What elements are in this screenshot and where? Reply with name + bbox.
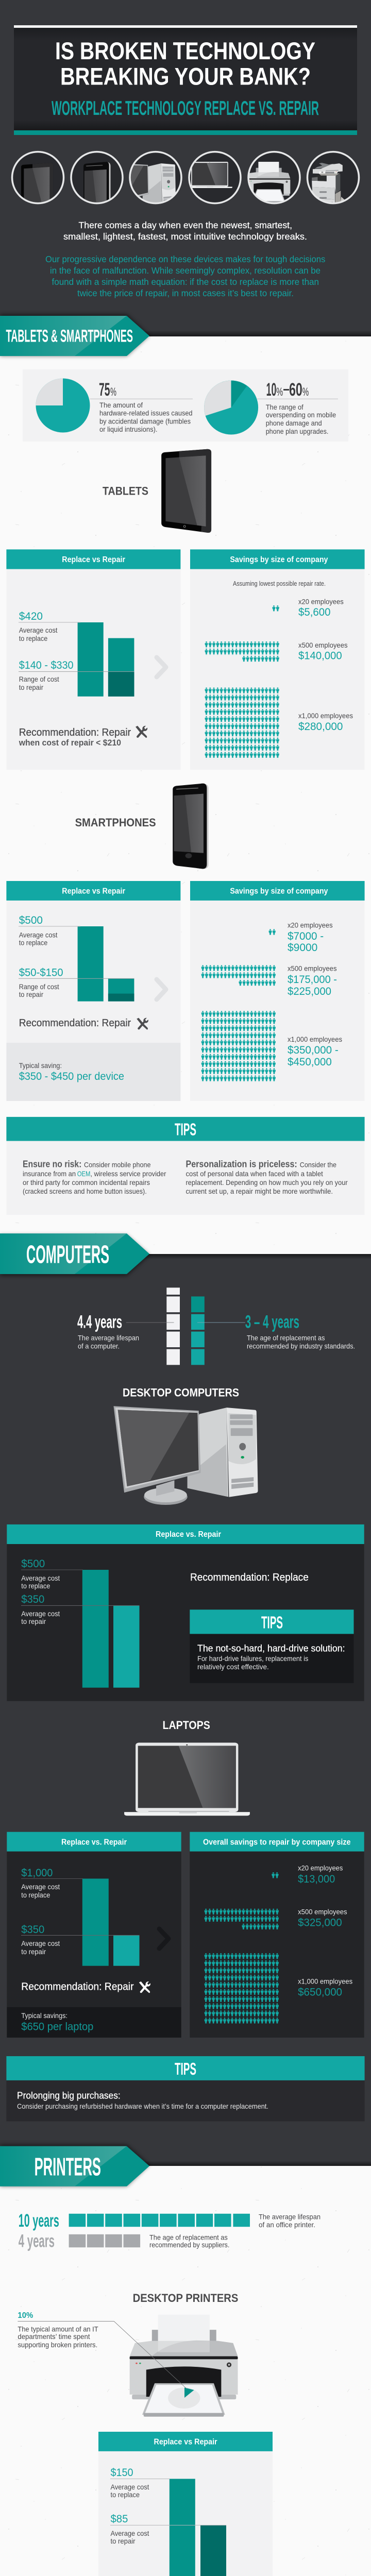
panel: smartphones replace vs repair: Replace vs Repair [62,887,125,895]
savings: 20 employees [288,921,333,954]
savings: 20 employees: x20 employees [298,598,344,606]
panel: laptops replace vs repair: Replace vs. Repair [61,1838,127,1846]
savings: 1000 employees: $280,000 [298,721,343,733]
stat: 10 to 60 percent: % [276,385,283,398]
stat: 75 percent: 75 [99,380,110,400]
tip: personalization: cost of personal data when faced with a tablet [185,1170,323,1178]
bar chart: tablet costs: Range of cost [19,675,59,683]
stat: 10 to 60 percent: overspending on mobile [266,411,336,419]
savings: 1000 employees [298,711,353,733]
arrow: chevron [157,657,166,677]
panel: mobile tips: TIPS [175,1120,196,1139]
bar chart: desktop printer costs: to replace [110,2490,140,2499]
bar chart: tablet costs: to repair [19,683,43,691]
bar chart: laptop costs: $1,000 [21,1867,53,1879]
callout: 10 percent of IT time: supporting broken printers. [18,2341,97,2349]
stat: 4.4 years [77,1312,174,1350]
bar chart: smartphone costs: Range of cost [19,982,59,991]
savings: 1000 employees: x1,000 employees [288,1035,342,1043]
stat: 3 to 4 years [197,1312,355,1350]
bar chart: smartphone costs: to replace [19,938,47,946]
stat: 10 years: The average lifespan [259,2212,321,2221]
tip: ensure no risk: or third party for common incidental repairs [23,1178,150,1187]
tips box: The not-so-hard, hard-drive solution: [197,1643,345,1653]
savings: 500 employees: $175,000 - [288,974,337,986]
panel: desktop printers replace vs repair [98,2432,273,2576]
savings: 500 employees: x500 employees [288,964,337,973]
stat: 10 to 60 percent: The range of [266,403,303,411]
chart: computer lifespan vs replacement age [77,1287,355,1365]
stat: 3 to 4 years: 3 – 4 years [245,1312,299,1332]
intro teal paragraph: twice the price of repair, in most cases it’s best to repair. [77,288,294,298]
callout: 10 percent of IT time [18,2311,187,2389]
savings: 1000 employees: x1,000 employees [298,711,353,720]
bar chart: desktop printer costs: to repair [110,2537,136,2545]
typical saving: $350 - $450 per device [19,1071,124,1082]
bar chart: desktop costs [21,1558,139,1688]
savings: 1000 employees: x1,000 employees [298,1977,352,1986]
icon: smartphone [173,784,209,869]
bar chart: tablet costs: to replace [19,634,47,642]
savings: 20 employees: $7000 - [288,930,324,942]
pictogram: 500 employees [201,965,276,986]
bar chart: desktop printer costs: $150 [110,2467,133,2479]
intro text [63,220,307,242]
panel: tablets replace vs repair: Replace vs Repair [62,555,125,564]
main title [55,37,315,90]
savings: 500 employees: $325,000 [298,1917,342,1929]
title panel [14,25,357,135]
bar chart: laptop costs [21,1867,139,1966]
savings: 20 employees: x20 employees [288,921,333,929]
section banner: computers: COMPUTERS [26,1241,109,1268]
panel: computer tips: TIPS [175,2059,196,2078]
main title: IS BROKEN TECHNOLOGY [55,37,315,64]
panel: smartphones savings by company size [190,881,365,1101]
tip: ensure no risk [23,1159,166,1195]
tip: personalization: replacement. Depending on how much you rely on your [185,1178,348,1187]
bar chart: smartphone costs: $50-$150 [19,967,63,978]
savings: 1000 employees: $350,000 - [288,1044,339,1056]
savings: 1000 employees: $450,000 [288,1056,332,1068]
arrow: chevron [159,1929,168,1948]
icon: phone circle [70,150,124,204]
pictogram: 1000 employees [205,687,280,759]
recommendation: Recommendation: Repair [19,727,131,738]
bar chart: desktop printer costs: Average cost [110,2529,149,2537]
intro teal paragraph [45,254,326,298]
typical saving [19,1061,124,1082]
tips box: TIPS [261,1613,283,1632]
stat: 75 percent: by accidental damage (fumbles [99,417,191,426]
panel: computer tips: Consider purchasing refurbished hardware when it’s time for a computer replacement. [17,2102,268,2110]
savings: 20 employees: x20 employees [298,1864,343,1872]
stat: 3 to 4 years: The age of replacement as [247,1333,325,1342]
icon: desktop computer [113,1406,258,1505]
panel: tablets savings by company size [190,549,365,770]
bar chart: desktop costs: to replace [21,1582,50,1590]
section banner: printers [0,2145,149,2187]
panel: desktop replace vs repair [7,1524,364,1701]
stat: 10 years: of an office printer. [259,2221,315,2229]
recommendation [19,726,147,748]
savings: 500 employees: $225,000 [288,986,331,997]
icon: printer circle [247,152,300,204]
typical savings: $650 per laptop [21,2021,93,2033]
heading: laptops: LAPTOPS [163,1719,210,1732]
callout: 10 percent of IT time: 10% [18,2311,33,2320]
recommendation: when cost of repair < $210 [19,738,121,748]
bar chart: laptop costs: to replace [21,1891,50,1899]
pictogram: 20 employees [272,1872,279,1878]
typical savings: Typical savings: [21,2011,68,2020]
panel: tablets savings by company size: Assuming lowest possible repair rate. [233,580,326,587]
bar chart: tablet costs: $420 [19,611,43,622]
bar chart: laptop costs: $350 [21,1924,44,1936]
heading: tablets: TABLETS [103,485,148,498]
section banner: computers [0,1233,149,1276]
bar chart: desktop costs: $500 [21,1558,45,1570]
main title: BREAKING YOUR BANK? [60,62,311,90]
bar segments: replacement age [191,1296,205,1365]
typical saving: Typical saving: [19,1061,62,1070]
icon: tablet circle [11,150,65,204]
savings: 500 employees [298,1908,347,1929]
stat: 10 to 60 percent: 60 [289,380,302,400]
stat: 10 to 60 percent: % [302,385,309,398]
pictogram: 20 employees [272,605,280,612]
bar chart: desktop costs: to repair [21,1617,46,1625]
bar chart: tablet costs: Average cost [19,626,58,634]
savings: 500 employees [288,964,337,997]
tips box: For hard-drive failures, replacement is [197,1654,308,1663]
stat: 10 years: 10 years [19,2211,59,2231]
pictogram: 1000 employees [201,1011,276,1082]
stat: 4 years: recommended by suppliers. [149,2241,229,2249]
bar chart: laptop costs: to repair [21,1947,46,1956]
stat: 4.4 years: of a computer. [78,1342,120,1350]
stat: 75 percent [90,380,193,433]
icon: multifunction printer circle [307,152,359,211]
panel: mobile tips [6,1117,365,1215]
tip: ensure no risk: Ensure no risk: [23,1159,81,1170]
section banner: printers: PRINTERS [35,2154,101,2181]
bar chart: tablet costs: $140 - $330 [19,659,74,671]
bar chart: desktop printer costs: $85 [110,2513,128,2525]
panel: laptop savings by company size: Overall savings to repair by company size [203,1838,351,1846]
pie chart: 10 to 60 percent [204,380,258,435]
savings: 20 employees: $13,000 [298,1873,335,1885]
bar chart: smartphone costs: to repair [19,990,43,998]
intro text: smallest, lightest, fastest, most intuitive technology breaks. [63,231,307,242]
icon: desktop circle [129,150,182,204]
stat: 75 percent: % [110,385,116,398]
typical savings [21,2011,93,2033]
bar chart: tablet costs [19,611,134,697]
intro teal paragraph: Our progressive dependence on these devices makes for tough decisions [45,254,326,264]
icon: tablet [161,449,211,533]
intro teal paragraph: found with a simple math equation: if the cost to replace is more than [52,277,319,287]
stat: 4 years: The age of replacement as [149,2233,228,2241]
stat: 75 percent: hardware-related issues caused [99,409,193,417]
panel: smartphones replace vs repair [6,881,180,1101]
tip: personalization: current set up, a repair might be more worthwhile. [185,1187,333,1195]
savings: 20 employees: $5,600 [298,606,331,618]
stat: 4.4 years: 4.4 years [77,1312,122,1332]
stat: 10 to 60 percent [257,380,338,435]
tip: ensure no risk: insurance from an [23,1170,76,1178]
pictogram: 1000 employees [204,1953,279,2025]
section banner: tablets and smartphones [0,314,149,356]
bar chart: laptop costs: Average cost [21,1883,60,1891]
tip: ensure no risk: (cracked screens and home button issues). [23,1187,147,1195]
bar segments: average lifespan [166,1287,180,1365]
arrow: chevron [157,979,166,999]
savings: 20 employees: $9000 [288,942,317,954]
heading: desktop printers: DESKTOP PRINTERS [133,2292,238,2304]
savings: 500 employees [298,641,348,662]
bar chart: desktop printer costs [110,2467,226,2576]
savings: 1000 employees: $650,000 [298,1987,342,1998]
pie chart: 75 percent [36,378,90,433]
tip: ensure no risk: Consider mobile phone [84,1161,151,1169]
recommendation: Recommendation: Repair [21,1981,134,1993]
stat: 10 years [19,2211,321,2231]
tip: ensure no risk: , wireless service provider [90,1170,166,1178]
savings: 20 employees [298,1864,343,1885]
icon: laptop circle [187,152,241,204]
callout: 10 percent of IT time: The typical amount of an IT [18,2325,98,2333]
chart: printer lifespan vs replacement age [19,2211,321,2251]
tips box [190,1609,353,1683]
panel: desktop replace vs repair: Replace vs. Repair [156,1530,221,1539]
stat: 4 years: 4 years [19,2231,55,2251]
savings: 500 employees: x500 employees [298,1908,347,1916]
bar chart: desktop costs: $350 [21,1594,44,1605]
stat: 3 to 4 years: recommended by industry standards. [247,1342,355,1350]
savings: 500 employees: $140,000 [298,650,342,662]
icon: desktop printer with pie on paper [130,2315,238,2417]
panel: laptops replace vs repair [7,1832,181,2038]
bar chart: smartphone costs [19,914,134,1002]
stat: 75 percent: or liquid intrusions). [99,425,158,433]
bar chart: smartphone costs: $500 [19,914,43,926]
intro text: There comes a day when even the newest, smartest, [78,220,292,230]
icon: laptop [124,1742,250,1816]
callout: 10 percent of IT time: departments’ time spent [18,2332,90,2341]
bar chart: laptop costs: Average cost [21,1939,60,1947]
pictogram: 20 employees [268,929,276,935]
bar chart: desktop printer costs: Average cost [110,2483,149,2491]
panel: laptop savings by company size [190,1832,364,2038]
pictogram: 500 employees [205,641,280,662]
savings: 20 employees [298,598,344,618]
section banner: tablets and smartphones: TABLETS & SMARTPHONES [6,327,133,346]
savings: 500 employees: x500 employees [298,641,348,649]
stat: 10 to 60 percent: 10 [266,380,276,400]
panel: tablets savings by company size: Savings by size of company [230,555,328,564]
pictogram: 500 employees [204,1909,279,1930]
panel: tablets replace vs repair [6,549,180,770]
intro teal paragraph: in the face of malfunction. While seemingly complex, resolution can be [50,265,321,276]
savings: 1000 employees [298,1977,352,1998]
device circles row [11,150,360,204]
stat: 10 to 60 percent: phone plan upgrades. [266,427,328,435]
panel: computer tips [6,2056,365,2122]
tips box: relatively cost effective. [197,1663,269,1671]
tip: personalization: Personalization is priceless: [185,1159,297,1170]
bar chart: desktop costs: Average cost [21,1609,60,1618]
recommendation: Recommendation: Replace [190,1572,309,1583]
tip: personalization [185,1159,348,1195]
panel: key statistics [23,369,348,442]
bar chart: desktop costs: Average cost [21,1574,60,1582]
heading: desktop computers: DESKTOP COMPUTERS [123,1386,239,1399]
stat: 75 percent: The amount of [99,401,143,409]
stat: 4 years [19,2231,229,2251]
panel: smartphones savings by company size: Savings by size of company [230,887,328,895]
panel: computer tips: Prolonging big purchases: [17,2091,121,2101]
stat: 4.4 years: The average lifespan [78,1333,139,1342]
heading: smartphones: SMARTPHONES [75,816,156,829]
panel: desktop printers replace vs repair: Replace vs Repair [154,2437,217,2446]
bar chart: smartphone costs: Average cost [19,930,58,939]
savings: 1000 employees [288,1035,342,1068]
tip: ensure no risk: OEM [77,1170,90,1178]
stat: 10 to 60 percent: phone damage and [266,419,322,427]
tip: personalization: Consider the [300,1161,336,1169]
recommendation: Recommendation: Repair [19,1018,131,1029]
